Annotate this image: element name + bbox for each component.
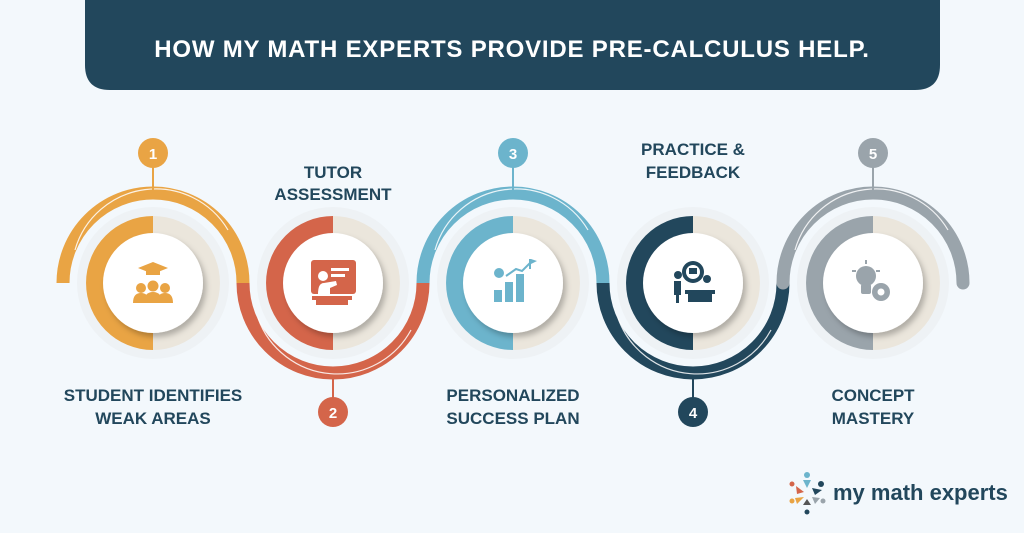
step 4: PRACTICE & bbox=[641, 140, 745, 159]
step 4: 4 bbox=[689, 405, 698, 422]
step 5: CONCEPT bbox=[831, 386, 915, 405]
step 2 bbox=[257, 163, 409, 427]
logo: my math experts bbox=[833, 480, 1008, 505]
step 5: MASTERY bbox=[832, 409, 915, 428]
step 5 bbox=[797, 138, 949, 428]
step 1: WEAK AREAS bbox=[95, 409, 211, 428]
step 3: SUCCESS PLAN bbox=[446, 409, 580, 428]
step 4: FEEDBACK bbox=[646, 163, 741, 182]
title banner: HOW MY MATH EXPERTS PROVIDE PRE-CALCULUS HELP. bbox=[154, 36, 870, 63]
step 1: STUDENT IDENTIFIES bbox=[64, 386, 242, 405]
step 2: TUTOR bbox=[304, 163, 362, 182]
logo bbox=[790, 472, 1008, 514]
step 1: 1 bbox=[149, 146, 157, 163]
step 5: 5 bbox=[869, 146, 877, 163]
connector bands bbox=[63, 189, 963, 374]
step 3 bbox=[437, 138, 589, 428]
step 2: ASSESSMENT bbox=[274, 185, 392, 204]
title banner bbox=[85, 0, 940, 90]
step 4 bbox=[617, 140, 769, 427]
step 3: PERSONALIZED bbox=[446, 386, 580, 405]
step 1 bbox=[64, 138, 242, 428]
step 3: 3 bbox=[509, 146, 517, 163]
step 2: 2 bbox=[329, 405, 337, 422]
